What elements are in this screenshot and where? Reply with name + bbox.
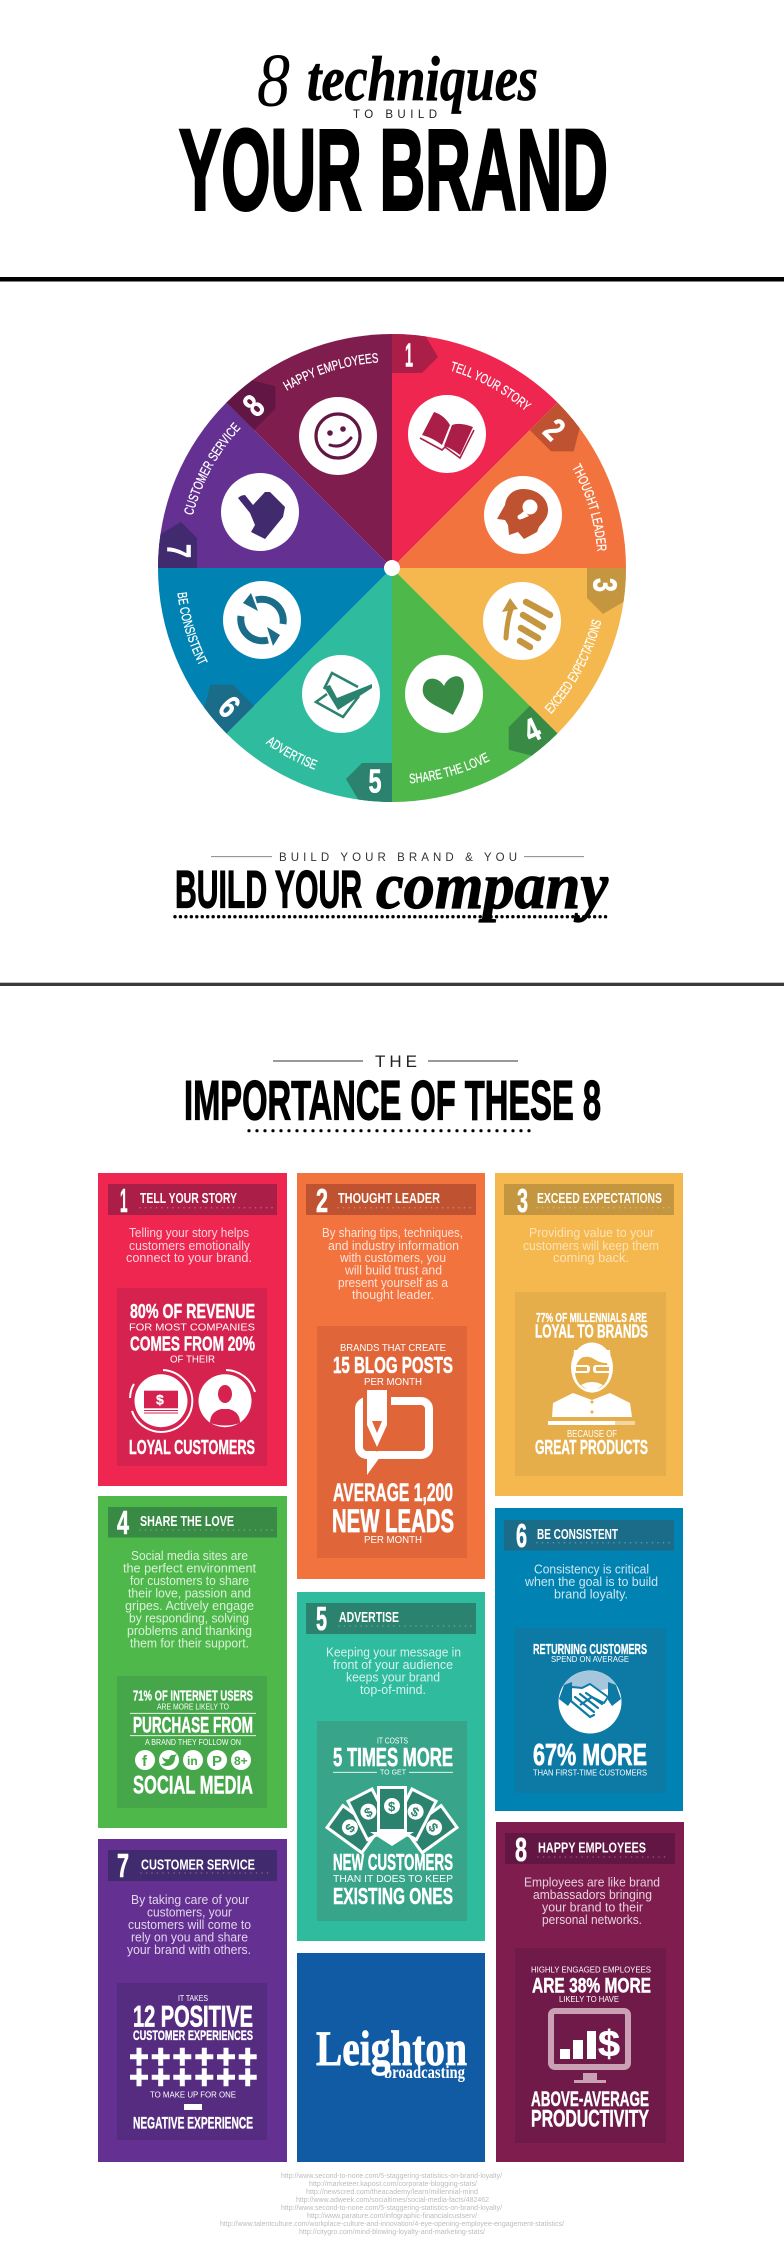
- panel 4: share the love: 4: [117, 1504, 129, 1541]
- panel 6: be consistent: [495, 1508, 683, 1811]
- panel 6: be consistent: BE CONSISTENT: [537, 1527, 618, 1543]
- panel 1: tell your story: 1: [120, 1182, 128, 1219]
- tagline: company: company: [376, 850, 609, 923]
- wheel labels: EXCEED EXPECTATIONS: [544, 620, 601, 714]
- tagline: build your: BUILD YOUR: [175, 860, 362, 920]
- wheel labels: THOUGHT LEADER: [572, 462, 606, 552]
- panel 3 body text: [523, 1226, 659, 1265]
- wheel numbers: 6: [211, 689, 247, 725]
- wheel numbers: 8: [235, 387, 271, 423]
- icon: speech bubble with pencil: [359, 1386, 429, 1475]
- icon: monitor with chart: [551, 2011, 628, 2083]
- source urls: http://marketeer.kapost.com/corporate-blogging-stats/: [309, 2179, 478, 2188]
- section heading: the importance of these 8: THE: [375, 1052, 417, 1071]
- title: [179, 39, 608, 234]
- icon: monitor with chart: $: [598, 2023, 620, 2064]
- panel 2 body text: By sharing tips, techniques,: [322, 1226, 463, 1240]
- icon: money in circle: $: [156, 1392, 164, 1408]
- panel 5 stat box: TO GET: [380, 1768, 406, 1776]
- icons: social media: in: [187, 1754, 198, 1768]
- panel 7 body text: customers, your: [147, 1906, 232, 1920]
- icon: envelope with check: [302, 655, 380, 733]
- icon: fan of dollar bills: $: [362, 1804, 376, 1821]
- panel: leighton broadcasting logo: broadcasting: [384, 2062, 465, 2082]
- panel 7: customer service: [98, 1839, 287, 2162]
- number tabs: [154, 330, 630, 806]
- wheel labels: BE CONSISTENT: [177, 592, 208, 664]
- panel 1 stat box: [117, 1288, 267, 1466]
- icons: social media: 8+: [234, 1754, 248, 1768]
- panel 1 stat box: OF THEIR: [170, 1354, 215, 1366]
- icon: fan of dollar bills: $: [408, 1804, 422, 1821]
- panel 3 stat box: [515, 1292, 666, 1476]
- title: to build: TO BUILD: [353, 109, 437, 121]
- panel 5 stat box: IT COSTS: [377, 1736, 408, 1745]
- wheel numbers: [160, 336, 624, 800]
- panel 2 body text: [322, 1226, 463, 1302]
- panel 1 stat box: COMES FROM 20%: [130, 1334, 255, 1356]
- panel 6 body text: when the goal is to build: [524, 1575, 658, 1589]
- panel 7: customer service: CUSTOMER SERVICE: [141, 1857, 255, 1873]
- panel 6 stat box: 67% MORE: [533, 1738, 647, 1772]
- panel 4 stat box: SOCIAL MEDIA: [133, 1771, 253, 1799]
- panel 7: customer service: 7: [117, 1847, 129, 1884]
- panel 5 stat box: NEW CUSTOMERS: [333, 1849, 453, 1875]
- panel 5 body text: front of your audience: [333, 1658, 453, 1672]
- panel 5 stat box: THAN IT DOES TO KEEP: [333, 1874, 453, 1885]
- panel 2: thought leader: THOUGHT LEADER: [338, 1191, 440, 1207]
- panel 4 stat box: A BRAND THEY FOLLOW ON: [145, 1738, 241, 1747]
- panel 8 body text: Employees are like brand: [524, 1876, 660, 1890]
- source urls: http://www.adweek.com/socialtimes/social-media-facts/482462: [296, 2195, 489, 2204]
- icon: millennial person: [548, 1342, 635, 1425]
- source urls: http://citygro.com/mind-blowing-loyalty-and-marketing-stats/: [299, 2227, 486, 2236]
- panel 4 body text: gripes. Actively engage: [125, 1599, 254, 1613]
- panel 2 body text: thought leader.: [352, 1288, 434, 1302]
- panel 4 stat box: PURCHASE FROM: [133, 1712, 253, 1737]
- panel 6: be consistent: 6: [516, 1517, 527, 1554]
- plus signs: [130, 2048, 257, 2086]
- panel 4 body text: the perfect environment: [123, 1562, 257, 1576]
- icon: arrow and rising bars: [483, 582, 561, 660]
- panel 7 stat box: TO MAKE UP FOR ONE: [150, 2090, 236, 2100]
- panel 4: share the love: SHARE THE LOVE: [140, 1514, 234, 1530]
- wheel labels: [177, 353, 606, 784]
- source urls: http://www.parature.com/infographic-financialcustserv/: [307, 2211, 478, 2220]
- panel 8 body text: your brand to their: [542, 1901, 643, 1915]
- panel 3: exceed expectations: EXCEED EXPECTATIONS: [537, 1191, 662, 1207]
- panel 4 body text: by responding, solving: [129, 1611, 249, 1625]
- source urls: http://newscred.com/theacademy/learn/millennial-mind: [306, 2187, 478, 2196]
- icon: fan of dollar bills: [325, 1786, 459, 1855]
- panel 8 body text: [524, 1876, 660, 1927]
- panel 8 stat box: ABOVE-AVERAGE: [531, 2087, 649, 2111]
- icons: social media: f: [142, 1753, 148, 1770]
- panel 5 stat box: [317, 1721, 467, 1921]
- icon: thumbs up: [221, 473, 299, 551]
- tagline: build your brand and you: BUILD YOUR BRAND & YOU: [279, 852, 517, 864]
- icon: money in circle: [130, 1370, 192, 1432]
- icon: customer in circle: [198, 1370, 255, 1427]
- panel 3: exceed expectations: [495, 1173, 683, 1496]
- panel 6 body text: brand loyalty.: [554, 1587, 628, 1601]
- panel 2 stat box: AVERAGE 1,200: [333, 1479, 453, 1507]
- panel 8: happy employees: [496, 1822, 684, 2162]
- icon: heart: [405, 655, 483, 733]
- panel: leighton broadcasting logo: Leighton: [316, 2020, 467, 2076]
- icon: fan of dollar bills: $: [342, 1820, 359, 1835]
- panel 5 stat box: EXISTING ONES: [333, 1883, 453, 1909]
- wheel numbers: 3: [586, 578, 624, 592]
- panel 5 body text: [326, 1646, 461, 1697]
- panel 7 stat box: [117, 1983, 267, 2140]
- wheel numbers: 4: [518, 710, 547, 750]
- panel 1: tell your story: [98, 1173, 287, 1486]
- tagline: build your brand and you: [175, 850, 609, 923]
- panel 6 stat box: THAN FIRST-TIME CUSTOMERS: [533, 1767, 647, 1777]
- panel: leighton broadcasting logo: [297, 1953, 485, 2162]
- section heading: the importance of these 8: [184, 1052, 601, 1132]
- panel 2 body text: will build trust and: [344, 1264, 442, 1278]
- title: 8: 8: [257, 39, 290, 123]
- panel 5 body text: top-of-mind.: [360, 1683, 426, 1697]
- panel 8 stat box: PRODUCTIVITY: [531, 2106, 649, 2133]
- panel 3 stat box: LOYAL TO BRANDS: [535, 1320, 648, 1342]
- wheel labels: TELL YOUR STORY: [452, 361, 532, 410]
- panel 4 stat box: 71% OF INTERNET USERS: [133, 1688, 253, 1705]
- icon: smiley: [299, 397, 377, 475]
- panel 6 body text: [524, 1562, 658, 1601]
- source urls: http://www.second-to-none.com/5-staggering-statistics-on-brand-loyalty/: [281, 2203, 503, 2212]
- panel 5: advertise: ADVERTISE: [339, 1610, 399, 1626]
- panel 4: share the love: [98, 1496, 287, 1828]
- brand wheel: [158, 334, 626, 802]
- panel 4 body text: for customers to share: [130, 1574, 249, 1588]
- panel 2: thought leader: [297, 1173, 485, 1579]
- icon: fan of dollar bills: $: [388, 1799, 396, 1814]
- panel 2 stat box: PER MONTH: [364, 1377, 422, 1388]
- title: techniques: techniques: [307, 43, 538, 114]
- panel 8 stat box: [515, 1948, 666, 2143]
- panel 8 stat box: ARE 38% MORE: [532, 1974, 651, 1998]
- panel 3 stat box: 77% OF MILLENNIALS ARE: [536, 1311, 647, 1325]
- wheel numbers: 7: [160, 544, 198, 558]
- panel 6 stat box: SPEND ON AVERAGE: [551, 1654, 629, 1664]
- panel 2 stat box: [317, 1326, 467, 1558]
- wheel labels: ADVERTISE: [266, 737, 318, 770]
- panel 1 stat box: FOR MOST COMPANIES: [129, 1322, 255, 1334]
- panel 8 body text: personal networks.: [542, 1913, 642, 1927]
- panel 7 body text: your brand with others.: [127, 1943, 251, 1957]
- panel 2 body text: with customers, you: [339, 1251, 446, 1265]
- wheel centre dot: [384, 560, 400, 576]
- panel 3 stat box: GREAT PRODUCTS: [535, 1437, 648, 1459]
- icons: social media: [135, 1750, 251, 1770]
- wheel numbers: 1: [405, 336, 413, 374]
- panel 4 body text: their love, passion and: [128, 1587, 251, 1601]
- panel 7 stat box: 12 POSITIVE: [133, 2001, 253, 2034]
- panel 7 body text: By taking care of your: [131, 1893, 249, 1907]
- panel 4 stat box: ARE MORE LIKELY TO: [157, 1702, 229, 1712]
- panel 7 body text: [127, 1893, 251, 1957]
- panel 2 stat box: PER MONTH: [364, 1535, 422, 1546]
- panel 8: happy employees: 8: [515, 1831, 527, 1868]
- panel 6 stat box: RETURNING CUSTOMERS: [533, 1641, 647, 1658]
- panel 7 stat box: CUSTOMER EXPERIENCES: [133, 2027, 253, 2043]
- panel 2 body text: and industry information: [328, 1239, 459, 1253]
- panel 2 stat box: 15 BLOG POSTS: [333, 1352, 453, 1378]
- icon: sync arrows: [223, 581, 301, 659]
- panel 2: thought leader: 2: [316, 1182, 328, 1219]
- wheel labels: CUSTOMER SERVICE: [184, 422, 241, 514]
- wheel numbers: 5: [368, 762, 382, 800]
- panel 4 body text: them for their support.: [130, 1637, 249, 1651]
- panel 3 stat box: BECAUSE OF: [567, 1429, 617, 1440]
- panel 6 body text: Consistency is critical: [534, 1562, 649, 1576]
- icon: head with lightbulb: [484, 476, 562, 554]
- panel 1: tell your story: TELL YOUR STORY: [140, 1191, 237, 1207]
- panel 5 body text: keeps your brand: [346, 1671, 440, 1685]
- panel 7 stat box: IT TAKES: [178, 1993, 208, 2003]
- panel 2 body text: present yourself as a: [338, 1276, 448, 1290]
- panel 1 stat box: LOYAL CUSTOMERS: [129, 1437, 255, 1459]
- wheel numbers: 2: [537, 411, 573, 447]
- icons: social media: P: [212, 1753, 222, 1770]
- panel 7 body text: rely on you and share: [131, 1931, 248, 1945]
- source urls: [220, 2171, 565, 2236]
- panel 7 body text: customers will come to: [128, 1918, 251, 1932]
- panel 2 stat box: BRANDS THAT CREATE: [340, 1343, 446, 1354]
- panel 5 body text: Keeping your message in: [326, 1646, 461, 1660]
- panel 4 stat box: [117, 1676, 267, 1808]
- wheel labels: HAPPY EMPLOYEES: [282, 353, 378, 391]
- panel 4 body text: problems and thanking: [127, 1624, 252, 1638]
- panel 5: advertise: [297, 1592, 485, 1941]
- source urls: http://www.second-to-none.com/5-staggering-statistics-on-brand-loyalty/: [281, 2171, 503, 2180]
- panel 1 body text: customers emotionally: [129, 1239, 251, 1253]
- panel 3 body text: Providing value to your: [529, 1226, 654, 1240]
- panel 1 body text: [126, 1226, 252, 1265]
- panel 3 body text: coming back.: [553, 1251, 629, 1265]
- panel 8 stat box: HIGHLY ENGAGED EMPLOYEES: [531, 1965, 651, 1975]
- panel 4 body text: [123, 1549, 257, 1651]
- panel 5 stat box: 5 TIMES MORE: [333, 1742, 453, 1772]
- panel 5: advertise: 5: [316, 1600, 327, 1637]
- icon: fan of dollar bills: $: [425, 1820, 442, 1835]
- panel 2 stat box: NEW LEADS: [332, 1503, 454, 1539]
- panel 4 body text: Social media sites are: [131, 1549, 248, 1563]
- panel 6 stat box: [515, 1628, 666, 1793]
- wheel labels: SHARE THE LOVE: [410, 752, 490, 784]
- panel 1 stat box: 80% OF REVENUE: [130, 1301, 255, 1323]
- icon: handshake: [558, 1670, 622, 1734]
- panel 1 body text: Telling your story helps: [129, 1226, 249, 1240]
- panel 8 stat box: LIKELY TO HAVE: [559, 1994, 619, 2004]
- panel 3 body text: customers will keep them: [523, 1239, 659, 1253]
- source urls: http://www.talentculture.com/workplace-culture-and-innovation/4-eye-opening-employee-engagement-statistics/: [220, 2219, 565, 2228]
- panel 7 stat box: NEGATIVE EXPERIENCE: [133, 2114, 253, 2132]
- icon: book: [408, 395, 486, 473]
- panel 8: happy employees: HAPPY EMPLOYEES: [538, 1841, 646, 1857]
- panel 8 body text: ambassadors bringing: [533, 1888, 652, 1902]
- panel 1 body text: connect to your brand.: [126, 1251, 252, 1265]
- panel 3: exceed expectations: 3: [517, 1182, 528, 1219]
